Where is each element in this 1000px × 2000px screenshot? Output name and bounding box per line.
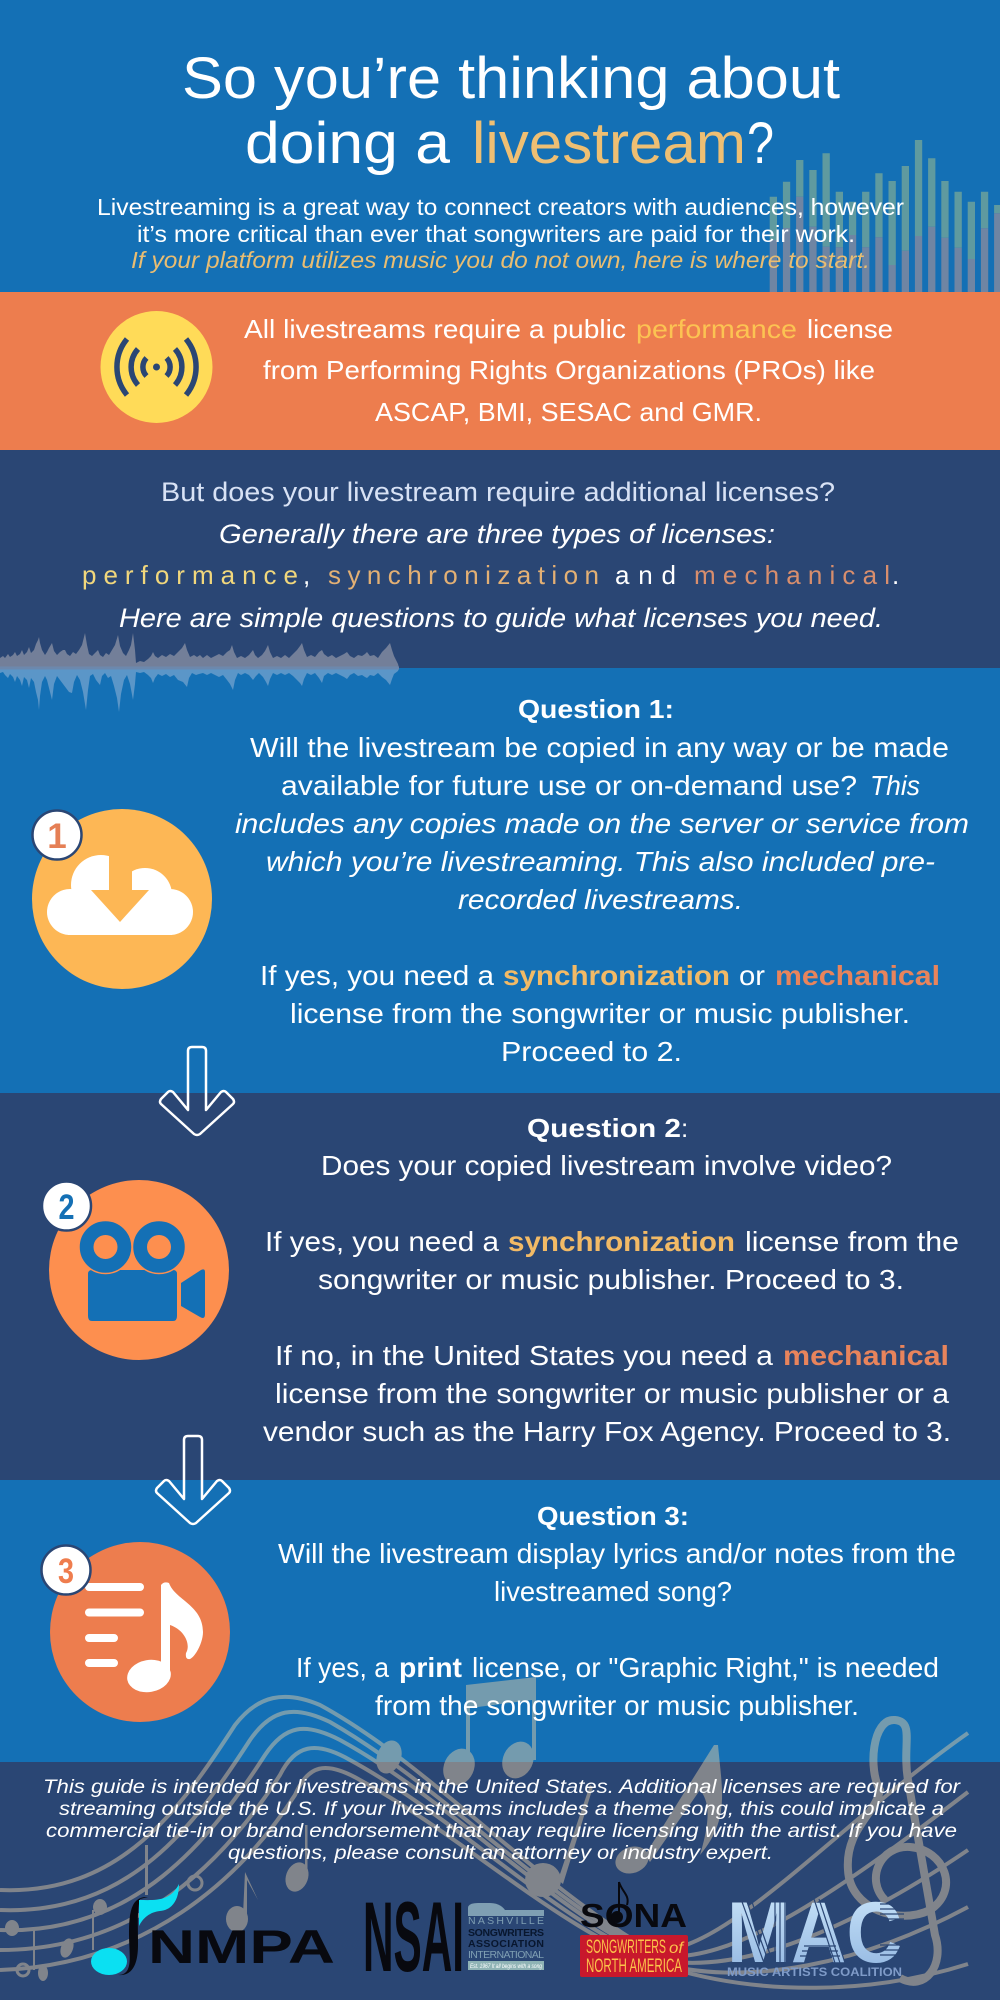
text: performance license statement: performance — [636, 314, 797, 344]
panel: question 2 — [0, 1093, 1000, 1480]
text: disclaimer — [43, 1776, 962, 1864]
text: license type names: mechanical — [694, 560, 890, 590]
text: question 1: available for future use or on-demand use? — [281, 770, 857, 801]
text: question 2: vendor such as the Harry Fox Agency. Proceed to 3. — [263, 1416, 951, 1447]
text: performance license statement: ASCAP, BMI, SESAC and GMR. — [375, 397, 762, 427]
text: performance license statement: All livestreams require a public — [244, 314, 626, 344]
text: question 3: license, or "Graphic Right," is needed — [472, 1652, 939, 1683]
panel: header — [0, 0, 1000, 292]
text: question 1: Proceed to 2. — [501, 1036, 682, 1067]
logo: NSAI: NSAI — [363, 1881, 464, 1992]
panel: public performance license — [0, 292, 1000, 450]
title: So you’re thinking about — [182, 46, 840, 111]
text: question 2: mechanical — [783, 1340, 949, 1371]
panel: footer disclaimer and logos — [0, 1677, 1000, 2000]
logo: NMPA — [91, 1884, 335, 1975]
text: disclaimer: questions, please consult an attorney or industry expert. — [228, 1842, 773, 1864]
beamed eighth notes — [437, 1677, 540, 1791]
text: question 1: which you’re livestreaming. This also included pre- — [266, 846, 935, 877]
text: question 2: songwriter or music publisher. Proceed to 3. — [318, 1264, 904, 1295]
text: question 1: or — [739, 960, 765, 991]
text: question 2: If yes, you need a — [265, 1226, 499, 1257]
logo: SONA: NORTH AMERICA — [586, 1956, 682, 1977]
intro text: If your platform utilizes music you do not own, here is where to start. — [131, 247, 870, 273]
logo: Music Artists Coalition: MUSIC ARTISTS COALITION — [727, 1965, 902, 1979]
text: question 2: synchronization — [508, 1226, 735, 1257]
text: performance license statement: license — [807, 314, 893, 344]
text: license type names: and — [615, 560, 676, 590]
logo: NSAI: Est. 1967 It all begins with a song — [470, 1964, 543, 1970]
text: question 1: license from the songwriter or music publisher. — [290, 998, 910, 1029]
logo: SONA: SONGWRITERS — [586, 1937, 666, 1958]
badge: number 3: 3 — [58, 1552, 74, 1591]
text: question 2: license from the — [745, 1226, 959, 1257]
text: performance license statement — [244, 314, 893, 427]
text: question 1: Will the livestream be copied in any way or be made — [250, 732, 949, 763]
text: three types of licenses: Generally there are three types of licenses: — [219, 519, 775, 549]
text: question 1: synchronization — [503, 960, 730, 991]
treble clef — [848, 1720, 946, 1982]
text: question 3: livestreamed song? — [494, 1576, 732, 1607]
badge: number 2: 2 — [58, 1188, 74, 1227]
title: livestream — [472, 111, 746, 176]
text: performance license statement: from Performing Rights Organizations (PROs) like — [263, 355, 875, 385]
text: question 2: If no, in the United States you need a — [275, 1340, 773, 1371]
icon: cloud download — [32, 809, 212, 989]
text: question 3: Will the livestream display lyrics and/or notes from the — [278, 1538, 956, 1569]
title: doing a — [245, 111, 451, 176]
panel: question 1 — [0, 668, 1000, 1093]
text: license type names: . — [892, 560, 899, 590]
icon: broadcast signal — [100, 311, 212, 423]
text: question 3: print — [399, 1652, 462, 1683]
text: question 1: recorded livestreams. — [458, 884, 743, 915]
text: question 1: Question 1: — [518, 694, 674, 724]
text: question 3: from the songwriter or music publisher. — [375, 1690, 859, 1721]
text: question 1: If yes, you need a — [260, 960, 494, 991]
text: question 2: Question 2 — [527, 1113, 681, 1143]
text: question 1: This — [870, 770, 920, 801]
logo: NSAI: SONGWRITERS — [468, 1927, 544, 1939]
title — [182, 46, 840, 176]
logo: Music Artists Coalition: MAC — [727, 1885, 902, 1981]
badge: number 1: 1 — [47, 817, 67, 856]
logo: NMPA: NMPA — [148, 1920, 335, 1973]
logo: SONA — [580, 1882, 688, 1977]
text: question 3: If yes, a — [296, 1652, 389, 1683]
logo: SONA: SONA — [580, 1897, 687, 1934]
logo: SONA: of — [669, 1940, 685, 1957]
text: disclaimer: commercial tie-in or brand endorsement that may require licensing with the artist. If you have — [46, 1820, 957, 1842]
intro text — [97, 194, 904, 273]
badge: number 1 — [32, 810, 82, 860]
text: question 1: mechanical — [775, 960, 940, 991]
panel: license types intro — [0, 450, 1000, 668]
text: guide sentence: Here are simple questions to guide what licenses you need. — [119, 603, 883, 633]
icon: movie camera — [49, 1180, 229, 1360]
text: question 3: Question 3: — [537, 1501, 689, 1531]
title: ? — [747, 111, 774, 176]
text: additional licenses question: But does your livestream require additional licenses? — [161, 477, 835, 507]
intro text: Livestreaming is a great way to connect creators with audiences, however — [97, 194, 904, 220]
panel: question 3 — [0, 1480, 1000, 1762]
intro text: it’s more critical than ever that songwriters are paid for their work. — [137, 221, 855, 247]
text: question 3 — [278, 1501, 956, 1721]
logo: NSAI: NASHVILLE — [468, 1915, 544, 1927]
text: disclaimer: This guide is intended for livestreams in the United States. Additional licenses are required for — [43, 1776, 962, 1798]
text: license type names — [82, 560, 899, 590]
text: question 2 — [263, 1113, 959, 1447]
text: question 2: license from the songwriter or music publisher or a — [275, 1378, 949, 1409]
chart: decorative equalizer bars — [770, 140, 1000, 292]
icon: lyrics and music note — [50, 1542, 230, 1722]
text: question 1: includes any copies made on the server or service from — [235, 808, 969, 839]
decoration: music staff and notes — [0, 1677, 968, 1988]
badge: number 3 — [42, 1546, 90, 1594]
logo: NSAI: INTERNATIONAL — [468, 1949, 544, 1961]
text: question 2: Does your copied livestream involve video? — [321, 1150, 892, 1181]
logo: NSAI: ASSOCIATION — [468, 1938, 544, 1950]
badge: number 2 — [42, 1182, 91, 1230]
arrow: question 1 to question 2 — [160, 1047, 234, 1135]
text: question 1 — [235, 694, 969, 1067]
text: license type names: synchronization — [328, 560, 599, 590]
text: license type names: performance — [82, 560, 298, 590]
arrow: question 2 to question 3 — [156, 1436, 230, 1524]
text: license type names: , — [303, 560, 310, 590]
decoration: audio waveform — [0, 633, 399, 712]
text: question 2: : — [681, 1113, 688, 1143]
text: disclaimer: streaming outside the U.S. If your livestreams includes a theme song, this could implicate a — [59, 1798, 944, 1820]
